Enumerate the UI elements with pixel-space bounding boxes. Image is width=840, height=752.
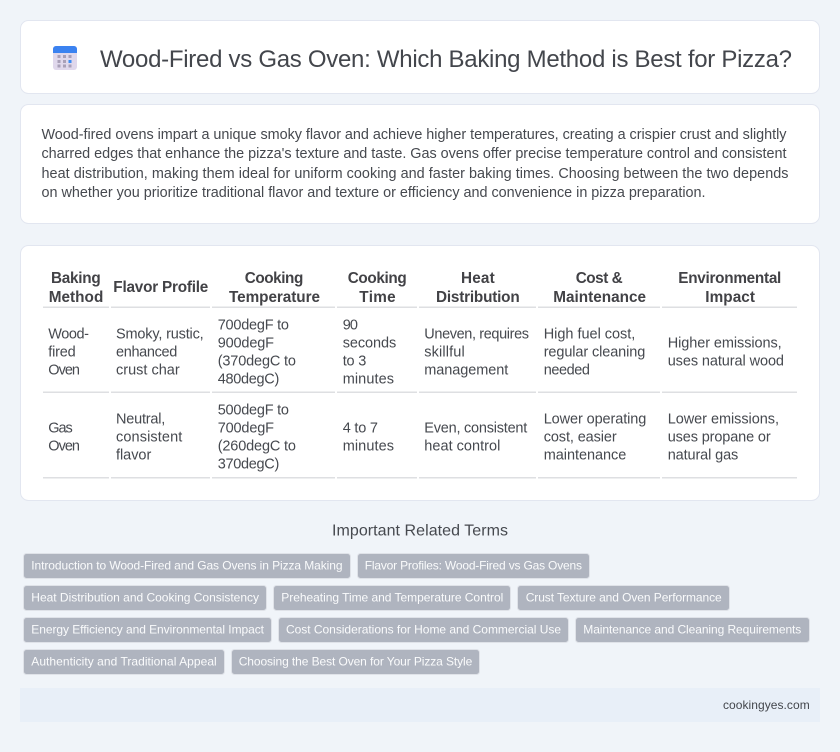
table row: wood-fired oven: Higher emissions, bbox=[668, 336, 782, 352]
table row: wood-fired oven: Smoky, rustic, bbox=[116, 326, 204, 342]
table row: gas oven: Gas bbox=[48, 420, 73, 436]
table row: wood-fired oven: 900degF bbox=[218, 336, 274, 352]
tag bbox=[358, 554, 590, 578]
table row: wood-fired oven: crust char bbox=[116, 362, 180, 378]
table header row: Heat bbox=[461, 270, 495, 287]
table row: wood-fired oven: High fuel cost, bbox=[544, 326, 635, 342]
table row: gas oven bbox=[48, 402, 779, 472]
table row: gas oven: heat control bbox=[424, 438, 500, 454]
tag: Introduction to Wood-Fired and Gas Ovens in Pizza Making bbox=[31, 558, 343, 572]
table row: wood-fired oven bbox=[48, 318, 784, 388]
tag bbox=[576, 618, 810, 642]
footer bar: cookingyes.com bbox=[723, 698, 810, 712]
tag: Maintenance and Cleaning Requirements bbox=[583, 622, 801, 636]
panel: intro paragraph: Wood-fired ovens impart a unique smoky flavor and achieve higher temperatures, creating a crispier crust and slightly bbox=[42, 127, 787, 143]
tag: Heat Distribution and Cooking Consistency bbox=[31, 590, 259, 604]
table row: wood-fired oven: fired bbox=[48, 344, 76, 360]
panel: intro paragraph: on whether you prioritize traditional flavor and texture or efficiency and convenience in pizza preparation. bbox=[42, 185, 706, 201]
table row: gas oven: cost, easier bbox=[544, 430, 617, 446]
header panel bbox=[20, 20, 820, 94]
tag: Crust Texture and Oven Performance bbox=[526, 590, 722, 604]
table row: gas oven: 370degC) bbox=[218, 456, 279, 472]
table row: wood-fired oven: minutes bbox=[343, 372, 394, 388]
table row: gas oven: 700degF bbox=[218, 420, 274, 436]
table row: gas oven: Lower operating bbox=[544, 412, 646, 428]
table row: gas oven: Lower emissions, bbox=[668, 412, 779, 428]
tag bbox=[278, 618, 568, 642]
table row: wood-fired oven: 700degF to bbox=[218, 318, 289, 334]
table header row: Cooking bbox=[348, 270, 407, 287]
table row: gas oven: maintenance bbox=[544, 448, 626, 464]
table header row: Cost & bbox=[576, 270, 623, 287]
table row: gas oven: minutes bbox=[343, 438, 394, 454]
table header row bbox=[49, 270, 781, 306]
panel: intro paragraph: charred edges that enhance the pizza's texture and taste. Gas ovens offer precise temperature control and consistent bbox=[42, 146, 786, 162]
title: Wood-Fired vs Gas Oven: Which Baking Method is Best for Pizza? bbox=[100, 46, 792, 73]
footer bar bbox=[20, 688, 820, 722]
table header row: Baking bbox=[51, 270, 101, 287]
tag bbox=[518, 586, 730, 610]
panel: intro paragraph bbox=[20, 104, 820, 224]
table row: wood-fired oven: to 3 bbox=[343, 354, 366, 370]
heading: related terms: Important Related Terms bbox=[332, 522, 508, 540]
table row: wood-fired oven: management bbox=[424, 362, 508, 378]
table row: wood-fired oven: skillful bbox=[424, 344, 465, 360]
table row: wood-fired oven: regular cleaning bbox=[544, 344, 645, 360]
table row: gas oven: (260degC to bbox=[218, 438, 296, 454]
tag: Flavor Profiles: Wood-Fired vs Gas Ovens bbox=[365, 558, 582, 572]
table header row: Cooking bbox=[245, 270, 303, 287]
table header row: Time bbox=[359, 289, 396, 306]
panel: comparison table bbox=[20, 246, 820, 500]
table row: gas oven: Oven bbox=[48, 438, 80, 454]
tag: Energy Efficiency and Environmental Impact bbox=[31, 622, 265, 636]
table header row: Temperature bbox=[229, 289, 320, 306]
table row: wood-fired oven: 480degC) bbox=[218, 372, 279, 388]
table row: wood-fired oven: Oven bbox=[48, 362, 80, 378]
tag: Preheating Time and Temperature Control bbox=[281, 590, 503, 604]
table row: wood-fired oven: 90 bbox=[343, 318, 358, 334]
icon: calendar bbox=[53, 46, 77, 70]
table row: gas oven: flavor bbox=[116, 448, 151, 464]
panel: intro paragraph: heat distribution, making them ideal for uniform cooking and faster baking times. Choosing between the two depends bbox=[42, 166, 788, 182]
tag bbox=[274, 586, 510, 610]
table row: wood-fired oven: enhanced bbox=[116, 344, 177, 360]
tag bbox=[24, 554, 350, 578]
table header row: Flavor Profile bbox=[113, 279, 208, 296]
table header row: Environmental bbox=[678, 270, 781, 287]
table row: gas oven: Even, consistent bbox=[424, 420, 527, 436]
tag: Cost Considerations for Home and Commercial Use bbox=[286, 622, 561, 636]
tag bbox=[24, 650, 224, 674]
table row: gas oven: 4 to 7 bbox=[343, 420, 378, 436]
table row: gas oven: Neutral, bbox=[116, 412, 165, 428]
table row: wood-fired oven: seconds bbox=[343, 336, 396, 352]
panel: related term tags bbox=[24, 554, 810, 674]
table header row: Maintenance bbox=[553, 289, 646, 306]
table row: wood-fired oven: needed bbox=[544, 362, 590, 378]
table row: gas oven: consistent bbox=[116, 430, 182, 446]
table header row: Distribution bbox=[436, 289, 520, 306]
table row: wood-fired oven: Uneven, requires bbox=[424, 326, 529, 342]
tag bbox=[232, 650, 480, 674]
table row: wood-fired oven: Wood- bbox=[48, 326, 89, 342]
tag: Choosing the Best Oven for Your Pizza Style bbox=[239, 654, 473, 668]
table header row: Method bbox=[49, 289, 103, 306]
table row: wood-fired oven: uses natural wood bbox=[668, 354, 784, 370]
tag: Authenticity and Traditional Appeal bbox=[31, 654, 217, 668]
table row: gas oven: 500degF to bbox=[218, 402, 289, 418]
table header row: Impact bbox=[705, 289, 755, 306]
tag bbox=[24, 618, 272, 642]
table row: gas oven: natural gas bbox=[668, 448, 738, 464]
tag bbox=[24, 586, 266, 610]
table row: gas oven: uses propane or bbox=[668, 430, 771, 446]
table row: wood-fired oven: (370degC to bbox=[218, 354, 296, 370]
